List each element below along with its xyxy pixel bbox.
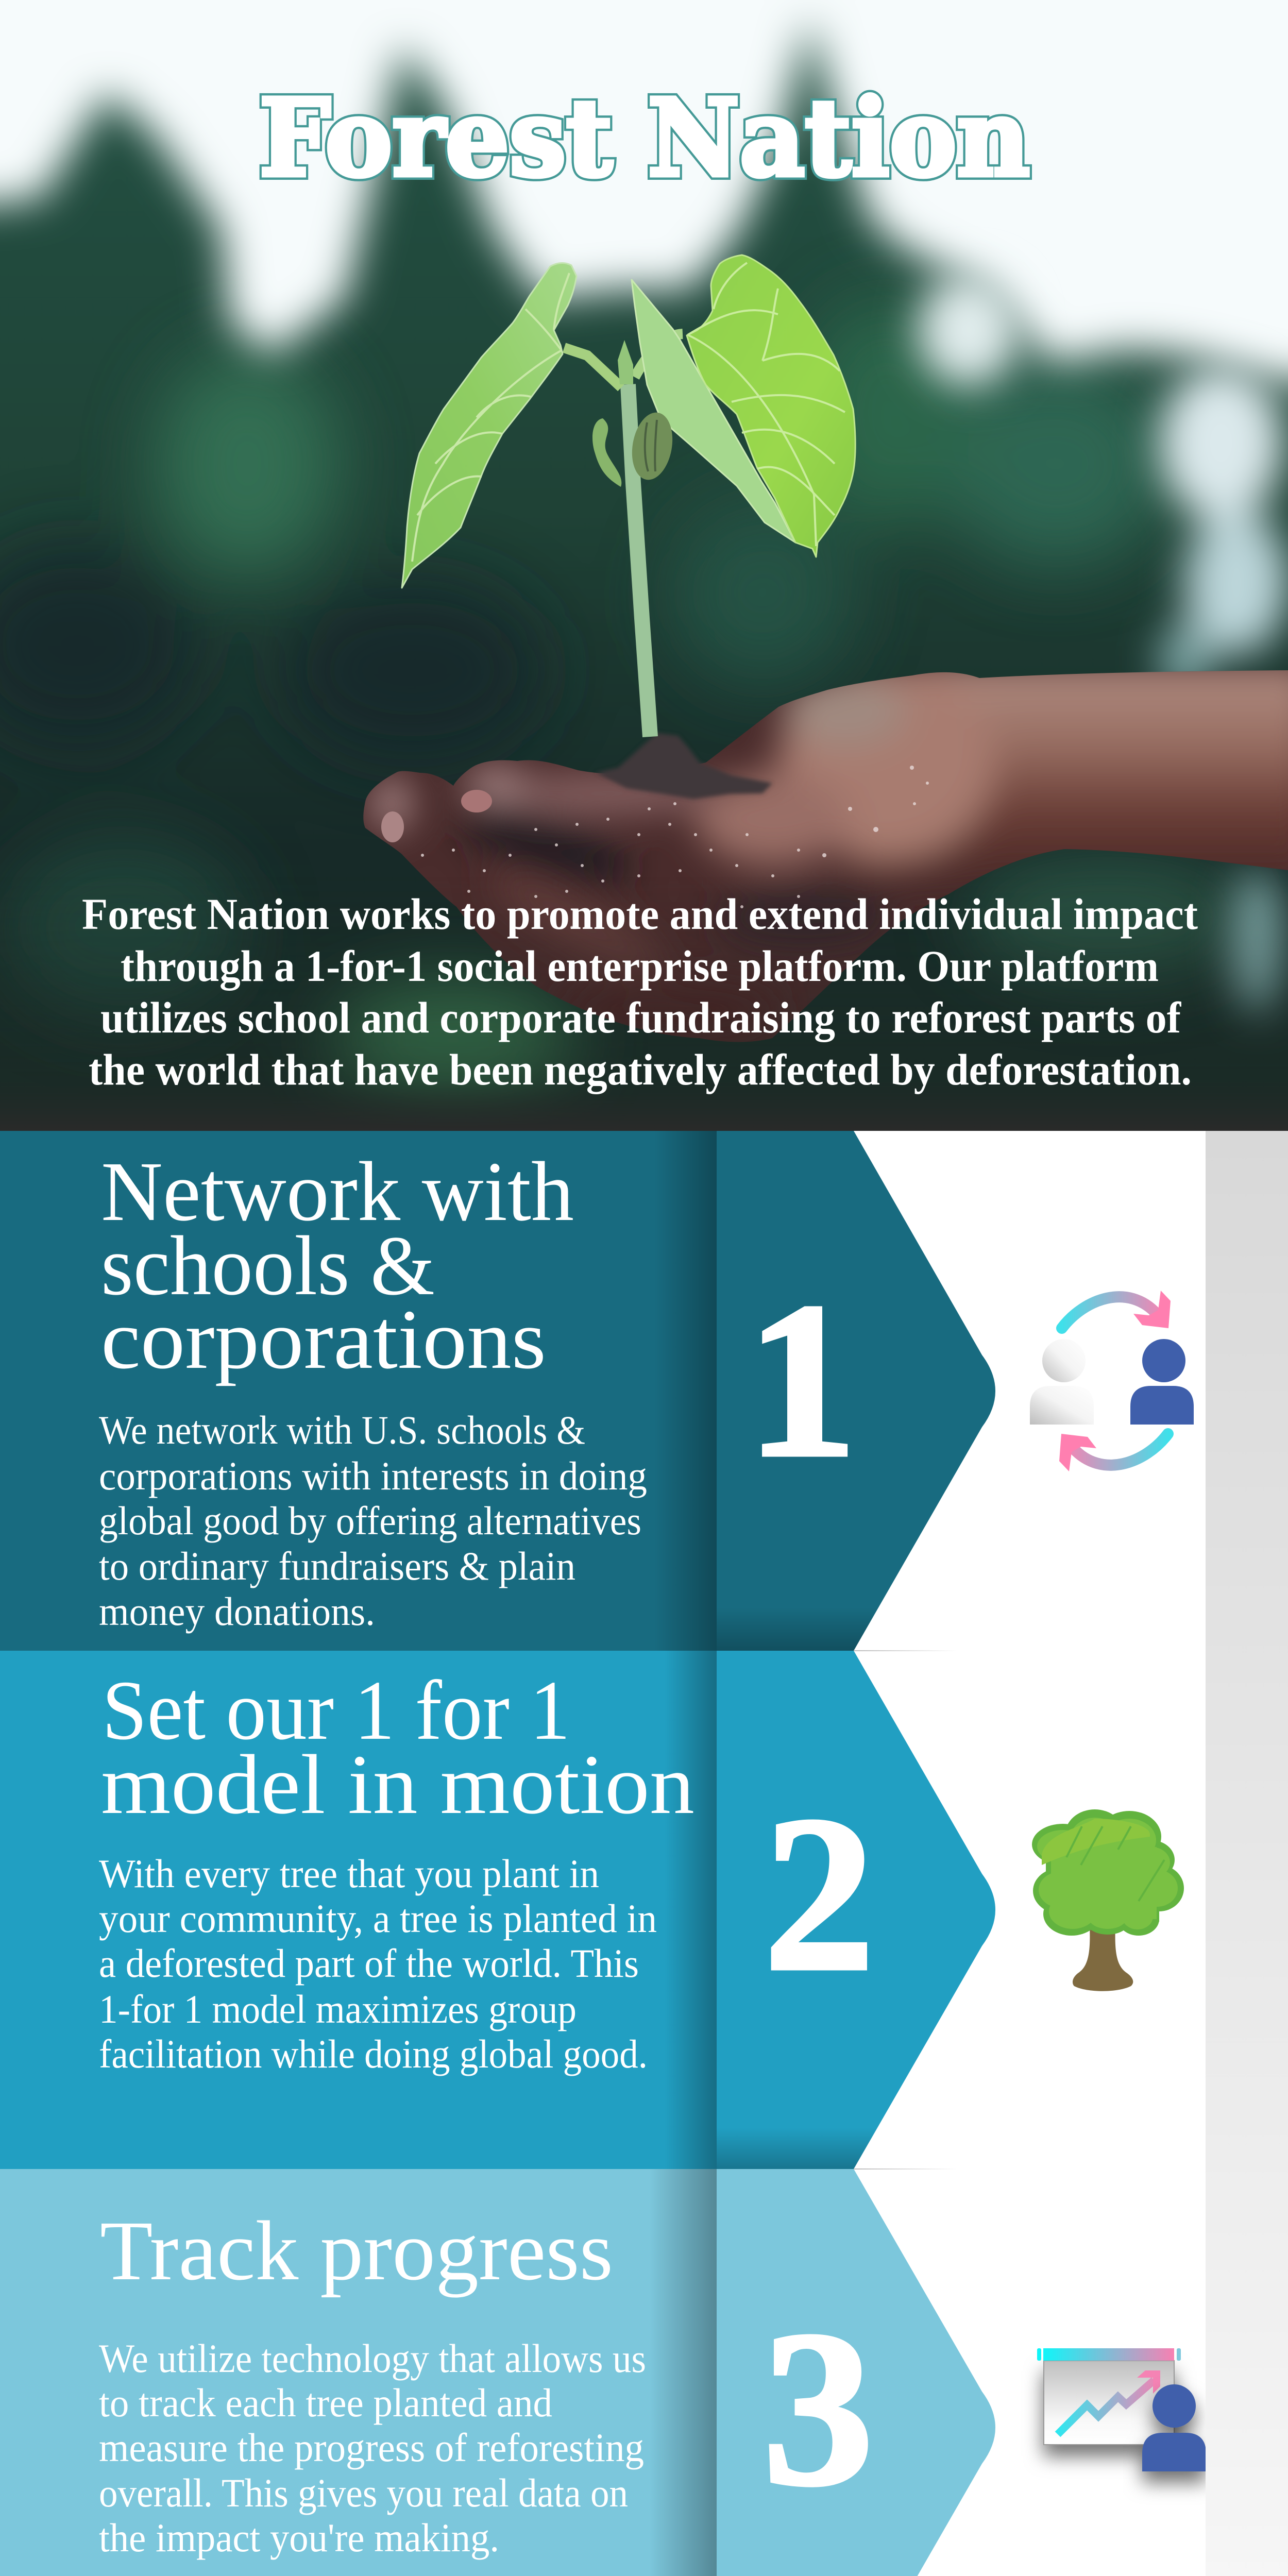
- step 1 heading: Network with: [101, 1144, 574, 1239]
- step 2 lower shadow: [717, 2128, 877, 2169]
- step 2 body text: [99, 1851, 657, 2076]
- step 2 background: [0, 1651, 717, 2169]
- intro text: the world that have been negatively affected by deforestation.: [89, 1045, 1192, 1094]
- icon: presentation chart: [1037, 2348, 1206, 2471]
- bottom arrow: [1059, 1434, 1168, 1471]
- grey side strip: [1206, 1131, 1288, 2576]
- title: Forest Nation: [259, 76, 1030, 200]
- step 2 body text: With every tree that you plant in: [99, 1851, 599, 1896]
- icon: people exchanging: [1030, 1291, 1194, 1471]
- step 2 heading: Set our 1 for 1: [102, 1663, 570, 1757]
- step 1 body text: to ordinary fundraisers & plain: [99, 1544, 575, 1588]
- buds: [592, 409, 677, 487]
- board top bar: [1037, 2348, 1181, 2361]
- step 1 body text: corporations with interests in doing: [99, 1453, 647, 1498]
- dark gradient behind text: [0, 876, 1288, 1131]
- step 2 shading: [665, 1651, 717, 2169]
- step 3 body text: [99, 2336, 646, 2560]
- icon: tree: [1032, 1809, 1184, 1991]
- step 3 body text: measure the progress of reforesting: [99, 2425, 644, 2470]
- step 2 chevron: [717, 1651, 995, 2169]
- soil: [596, 733, 772, 799]
- presenter: [1142, 2384, 1206, 2471]
- intro text: through a 1-for-1 social enterprise platform. Our platform: [121, 941, 1159, 991]
- step 1 heading: [101, 1144, 574, 1386]
- right leaf back: [632, 280, 795, 543]
- step 1 heading: schools &: [101, 1218, 435, 1313]
- step 1 body text: We network with U.S. schools &: [99, 1408, 585, 1452]
- step 1 shading: [654, 1131, 717, 1651]
- step 3 body text: overall. This gives you real data on: [99, 2470, 628, 2515]
- step 1 number: 1: [746, 1257, 857, 1503]
- panel: step 1: [0, 1131, 995, 1651]
- left leaf: [402, 263, 577, 588]
- step 1 background: [0, 1131, 717, 1651]
- step 3 body text: the impact you're making.: [99, 2515, 499, 2560]
- title: Forest Nation: [259, 76, 1030, 200]
- panel: step 2: [0, 1651, 995, 2169]
- panel: step 3: [0, 2169, 995, 2576]
- step 2 body text: 1-for 1 model maximizes group: [99, 1987, 577, 2031]
- foliage: [1032, 1809, 1184, 1936]
- step 2 body text: a deforested part of the world. This: [99, 1941, 639, 1986]
- right leaf front: [687, 255, 855, 557]
- step 2 body text: facilitation while doing global good.: [99, 2031, 648, 2076]
- step 3 number: 3: [762, 2285, 874, 2532]
- top arrow: [1062, 1291, 1171, 1328]
- step 1 body text: [99, 1408, 647, 1634]
- rising line chart: [1058, 2370, 1160, 2434]
- intro text: utilizes school and corporate fundraising to reforest parts of: [100, 993, 1181, 1042]
- step 3 body text: to track each tree planted and: [99, 2380, 552, 2425]
- step 3 heading: Track progress: [100, 2204, 613, 2298]
- trunk: [1073, 1927, 1133, 1991]
- intro text: [82, 889, 1198, 1094]
- step 2 heading: model in motion: [101, 1737, 694, 1832]
- step 1 heading: corporations: [101, 1292, 546, 1386]
- step 1 lower shadow: [717, 1607, 878, 1651]
- step 1 body text: global good by offering alternatives: [99, 1498, 641, 1543]
- step 2 body text: your community, a tree is planted in: [99, 1896, 657, 1941]
- step 2 heading: [101, 1663, 694, 1832]
- blue person: [1130, 1339, 1194, 1425]
- arm and hand: [363, 670, 1288, 1042]
- step 1 body text: money donations.: [99, 1589, 375, 1634]
- step 3 chevron: [717, 2169, 995, 2576]
- step 1 chevron: [717, 1131, 995, 1651]
- intro text: Forest Nation works to promote and extend individual impact: [82, 889, 1198, 939]
- board: [1044, 2361, 1174, 2445]
- blurred forest background: [0, 0, 1288, 1131]
- step 3 shading: [649, 2169, 717, 2576]
- step 3 body text: We utilize technology that allows us: [99, 2336, 646, 2381]
- step 2 number: 2: [764, 1771, 875, 2017]
- hero photo: seedling in a hand: [0, 0, 1288, 1131]
- white person: [1030, 1339, 1094, 1425]
- step 3 background: [0, 2169, 717, 2576]
- seedling stem: [564, 334, 683, 737]
